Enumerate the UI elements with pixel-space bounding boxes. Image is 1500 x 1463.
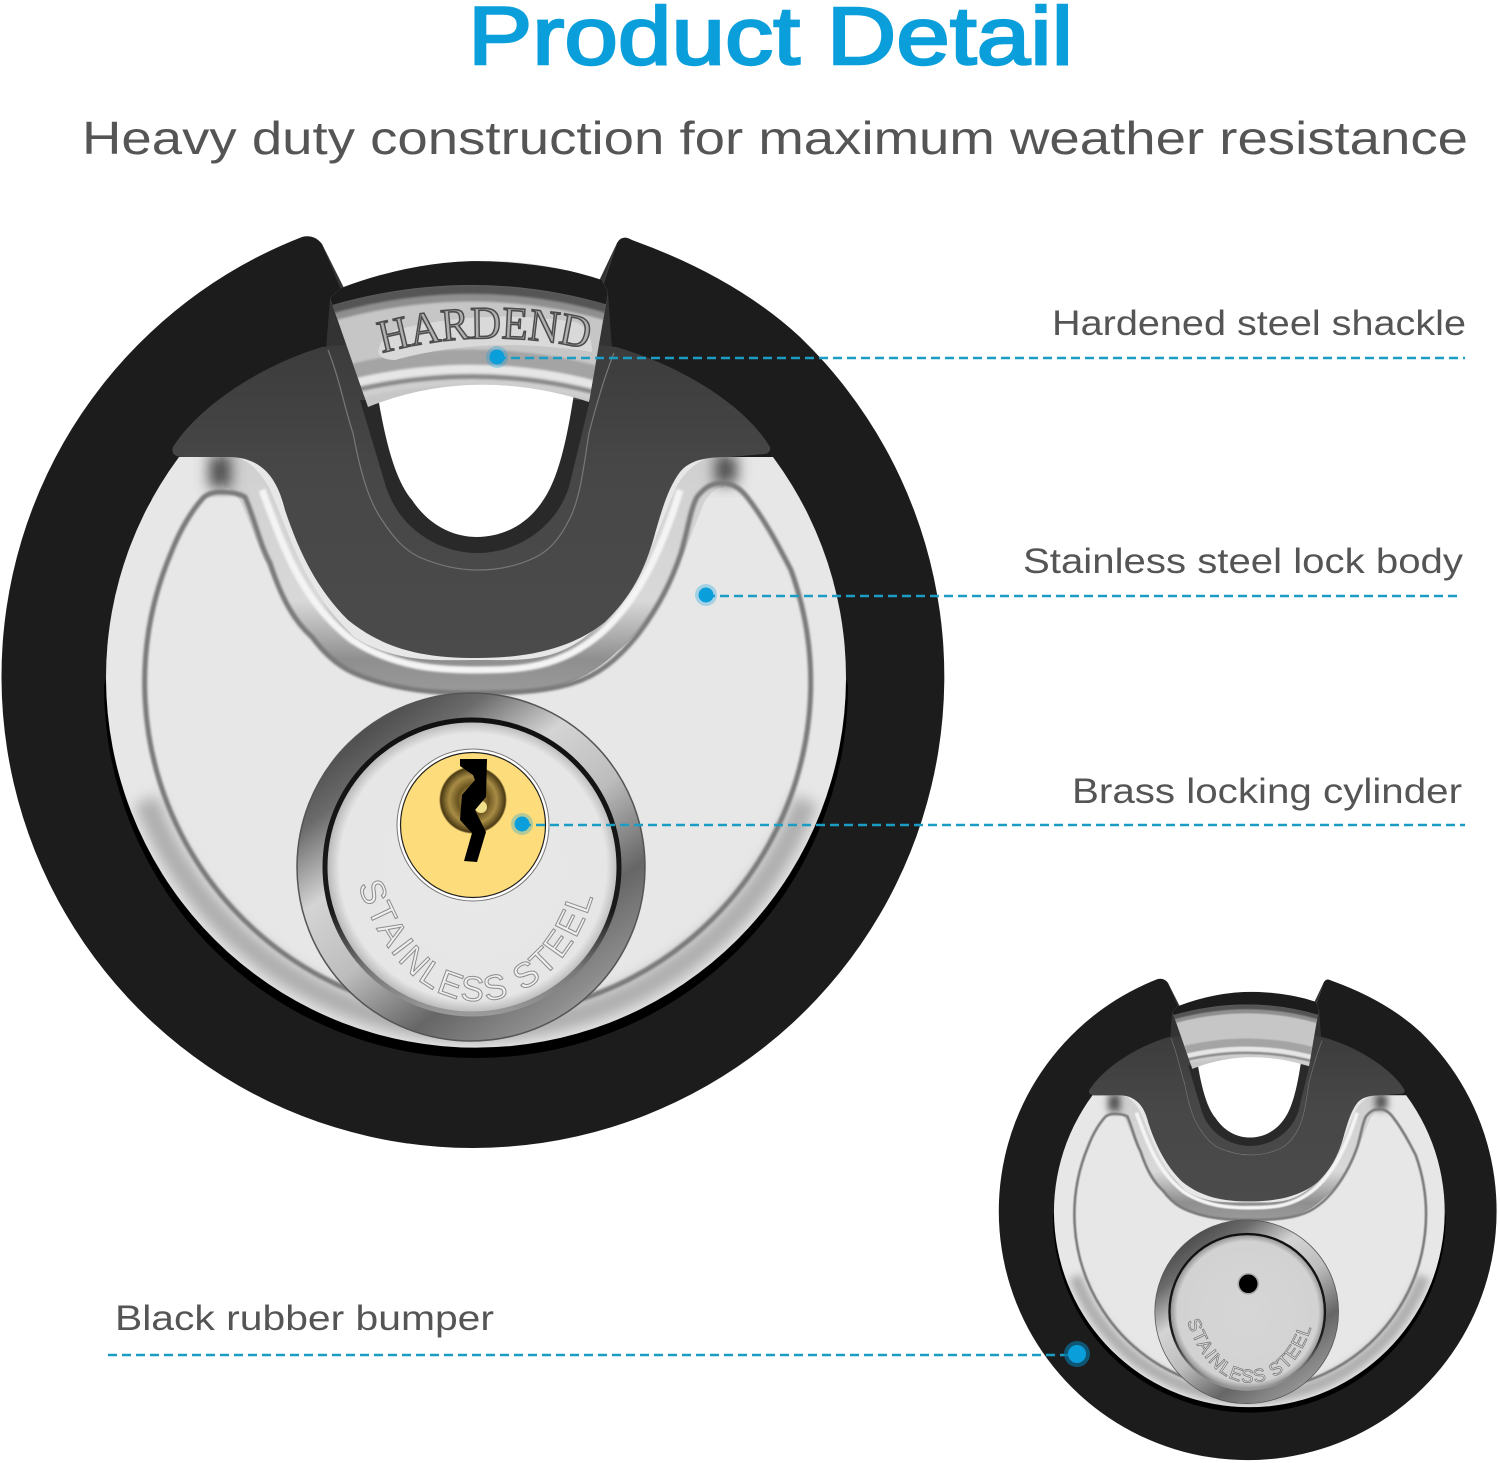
small padlock (rear view) xyxy=(998,978,1497,1460)
engraving: STAINLESS STEEL: STAINLESS STEEL xyxy=(360,880,594,1002)
large padlock xyxy=(2,236,944,1148)
callout: stainless steel lock body: Stainless steel lock body xyxy=(1023,542,1464,581)
rear face xyxy=(1171,1235,1324,1388)
callout: hardened steel shackle: Hardened steel shackle xyxy=(1052,304,1466,343)
engraving: STAINLESS STEEL small: STAINLESS STEEL xyxy=(1188,1318,1312,1383)
callout: brass locking cylinder xyxy=(511,772,1465,835)
shackle engraving: HARDEND: HARDEND xyxy=(376,307,590,354)
key slot xyxy=(460,759,487,862)
key hole xyxy=(1238,1274,1258,1294)
callout: brass locking cylinder: Brass locking cylinder xyxy=(1072,772,1462,811)
callout: stainless steel lock body xyxy=(695,542,1464,606)
brass cylinder xyxy=(397,749,549,901)
callout: black rubber bumper: Black rubber bumper xyxy=(115,1299,494,1338)
callout: black rubber bumper xyxy=(108,1299,1090,1367)
subtitle: Heavy duty construction for maximum weather resistance xyxy=(82,112,1468,164)
callout: hardened steel shackle xyxy=(486,304,1466,368)
